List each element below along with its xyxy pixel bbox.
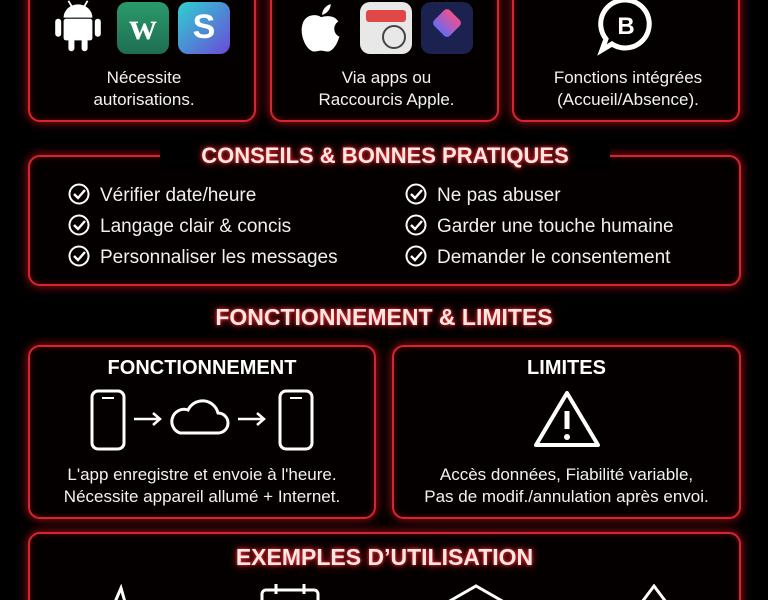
heading: CONSEILS & BONNES PRATIQUES xyxy=(201,143,569,168)
heading: EXEMPLES D’UTILISATION xyxy=(236,544,533,570)
icon: shortcuts xyxy=(421,2,473,54)
icon: w app xyxy=(117,2,169,54)
text xyxy=(318,68,455,109)
icon: apple xyxy=(302,4,340,52)
icon: w app: w xyxy=(129,6,157,48)
icon: s app xyxy=(178,2,230,54)
heading: LIMITES xyxy=(527,357,606,379)
icon: warning xyxy=(534,390,600,447)
checklist left: Vérifier date/heure xyxy=(100,185,256,206)
checklist right: Garder une touche humaine xyxy=(437,216,674,237)
text: L'app enregistre et envoie à l'heure. xyxy=(67,465,337,484)
text xyxy=(64,465,340,506)
heading: fonctionnement & limites: FONCTIONNEMENT & LIMITES xyxy=(215,304,553,330)
text: Pas de modif./annulation après envoi. xyxy=(424,487,709,506)
diagram: phone cloud phone xyxy=(90,390,314,450)
text xyxy=(93,68,195,109)
icon: calendar xyxy=(360,2,412,54)
icons row xyxy=(114,584,666,600)
icon: business B: B xyxy=(617,13,635,40)
icon: s app: S xyxy=(193,8,215,46)
checklist right: Ne pas abuser xyxy=(437,185,561,206)
text: Via apps ou xyxy=(342,68,431,87)
checklist right xyxy=(406,184,674,268)
checklist left: Langage clair & concis xyxy=(100,216,291,237)
text: Fonctions intégrées xyxy=(554,68,702,87)
text: Nécessite appareil allumé + Internet. xyxy=(64,487,340,506)
panel: apple xyxy=(270,0,499,122)
text: autorisations. xyxy=(93,90,195,109)
text: (Accueil/Absence). xyxy=(557,90,699,109)
panel: exemples xyxy=(28,532,741,600)
panel: android xyxy=(28,0,256,122)
panel: conseils xyxy=(28,155,741,286)
panel: whatsapp business xyxy=(512,0,740,122)
text xyxy=(554,68,702,109)
heading: FONCTIONNEMENT xyxy=(108,357,296,379)
text: Accès données, Fiabilité variable, xyxy=(440,465,693,484)
panel: limites xyxy=(392,345,741,519)
text: Nécessite xyxy=(107,68,181,87)
text: Raccourcis Apple. xyxy=(318,90,455,109)
checklist left xyxy=(68,184,338,268)
text xyxy=(424,465,709,506)
icon: business B xyxy=(597,0,652,56)
icon: android xyxy=(55,0,101,52)
panel: fonctionnement xyxy=(28,345,376,519)
checklist right: Demander le consentement xyxy=(437,247,670,268)
checklist left: Personnaliser les messages xyxy=(100,247,338,268)
